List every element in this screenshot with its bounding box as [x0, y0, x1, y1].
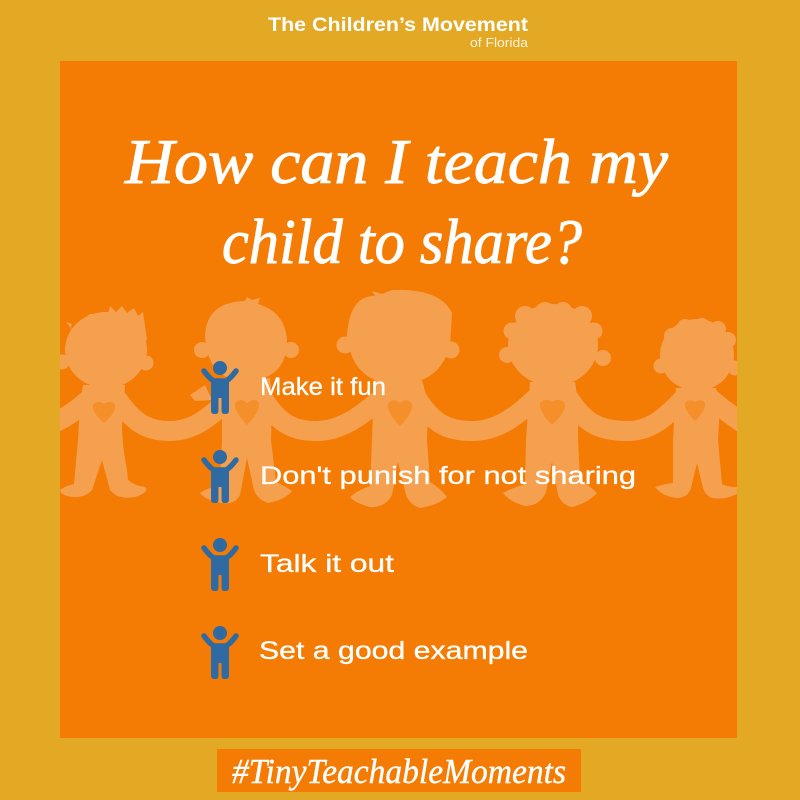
- title: [124, 127, 668, 277]
- joined arms: [50, 398, 750, 431]
- child 2: [190, 297, 299, 503]
- hashtag banner: #TinyTeachableMoments: [232, 752, 566, 791]
- hearts: [93, 400, 705, 426]
- label: Talk it out: [260, 550, 394, 578]
- list item 3: talk it out: [204, 538, 394, 591]
- list item 1: make it fun: [204, 361, 386, 414]
- label: Set a good example: [259, 637, 528, 665]
- child 3: [336, 290, 460, 508]
- organization logo: of Florida: [470, 36, 528, 50]
- icon: blue child: [204, 626, 236, 679]
- organization logo: [268, 14, 529, 50]
- list item 4: set a good example: [204, 626, 528, 679]
- paper chain of children: [50, 290, 750, 508]
- list item 2: don't punish: [204, 450, 636, 503]
- title: How can I teach my: [124, 127, 668, 197]
- title: child to share?: [222, 207, 582, 277]
- child 4: [499, 302, 611, 507]
- label: Don't punish for not sharing: [260, 462, 636, 490]
- child 5: [654, 318, 742, 498]
- child 1: [54, 306, 154, 498]
- icon: blue child: [204, 361, 236, 414]
- icon: blue child: [204, 450, 236, 503]
- icon: blue child: [204, 538, 236, 591]
- label: Make it fun: [260, 373, 386, 401]
- panel: main orange: [60, 61, 737, 738]
- organization logo: The Children’s Movement: [268, 14, 529, 36]
